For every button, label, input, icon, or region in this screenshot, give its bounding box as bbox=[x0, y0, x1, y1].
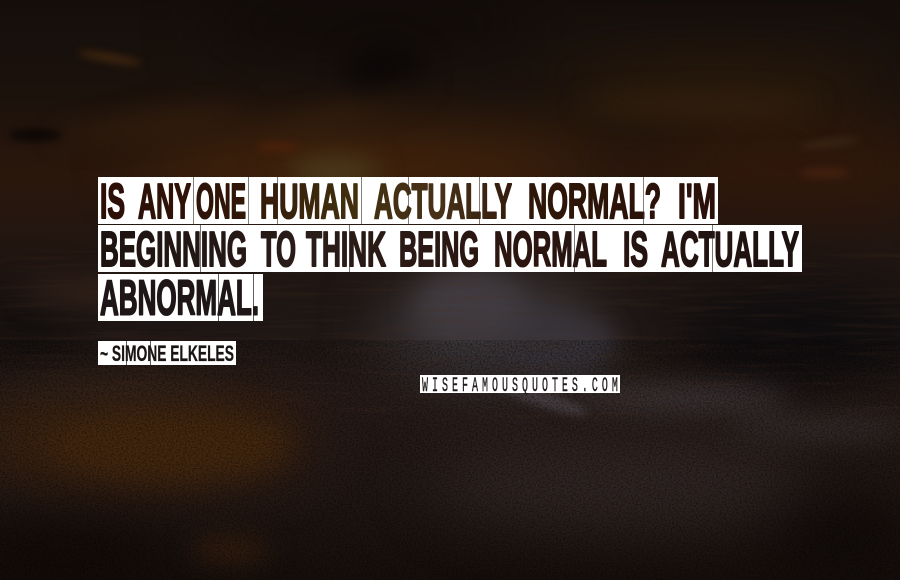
quote line 2: IS bbox=[623, 223, 648, 277]
website watermark: WISEFAMOUSQUOTES.COM bbox=[422, 375, 622, 397]
quote line 1: ANY bbox=[138, 175, 191, 229]
quote line 1 bbox=[98, 175, 718, 229]
quote line 2: THINK bbox=[306, 223, 386, 277]
quote line 2: TO bbox=[261, 223, 296, 277]
quote line 2: NORMAL bbox=[494, 223, 607, 277]
quote line 1: ONE bbox=[196, 175, 246, 229]
quote line 1: IS bbox=[100, 175, 125, 229]
quote line 1: HUMAN bbox=[260, 175, 359, 229]
author credit: ~ SIMONE ELKELES bbox=[100, 341, 234, 366]
quote line 1: ACTUALLY bbox=[374, 175, 512, 229]
quote line 3 bbox=[98, 272, 263, 326]
quote line 2 bbox=[98, 223, 802, 277]
quote line 2: BEGINNING bbox=[100, 223, 247, 277]
quote line 3: ABNORMAL. bbox=[100, 272, 259, 326]
author credit bbox=[98, 341, 236, 366]
quote line 2: BEING bbox=[399, 223, 479, 277]
quote line 1: NORMAL? bbox=[528, 175, 661, 229]
quote line 1: I'M bbox=[678, 175, 716, 229]
quote text bbox=[98, 175, 802, 326]
